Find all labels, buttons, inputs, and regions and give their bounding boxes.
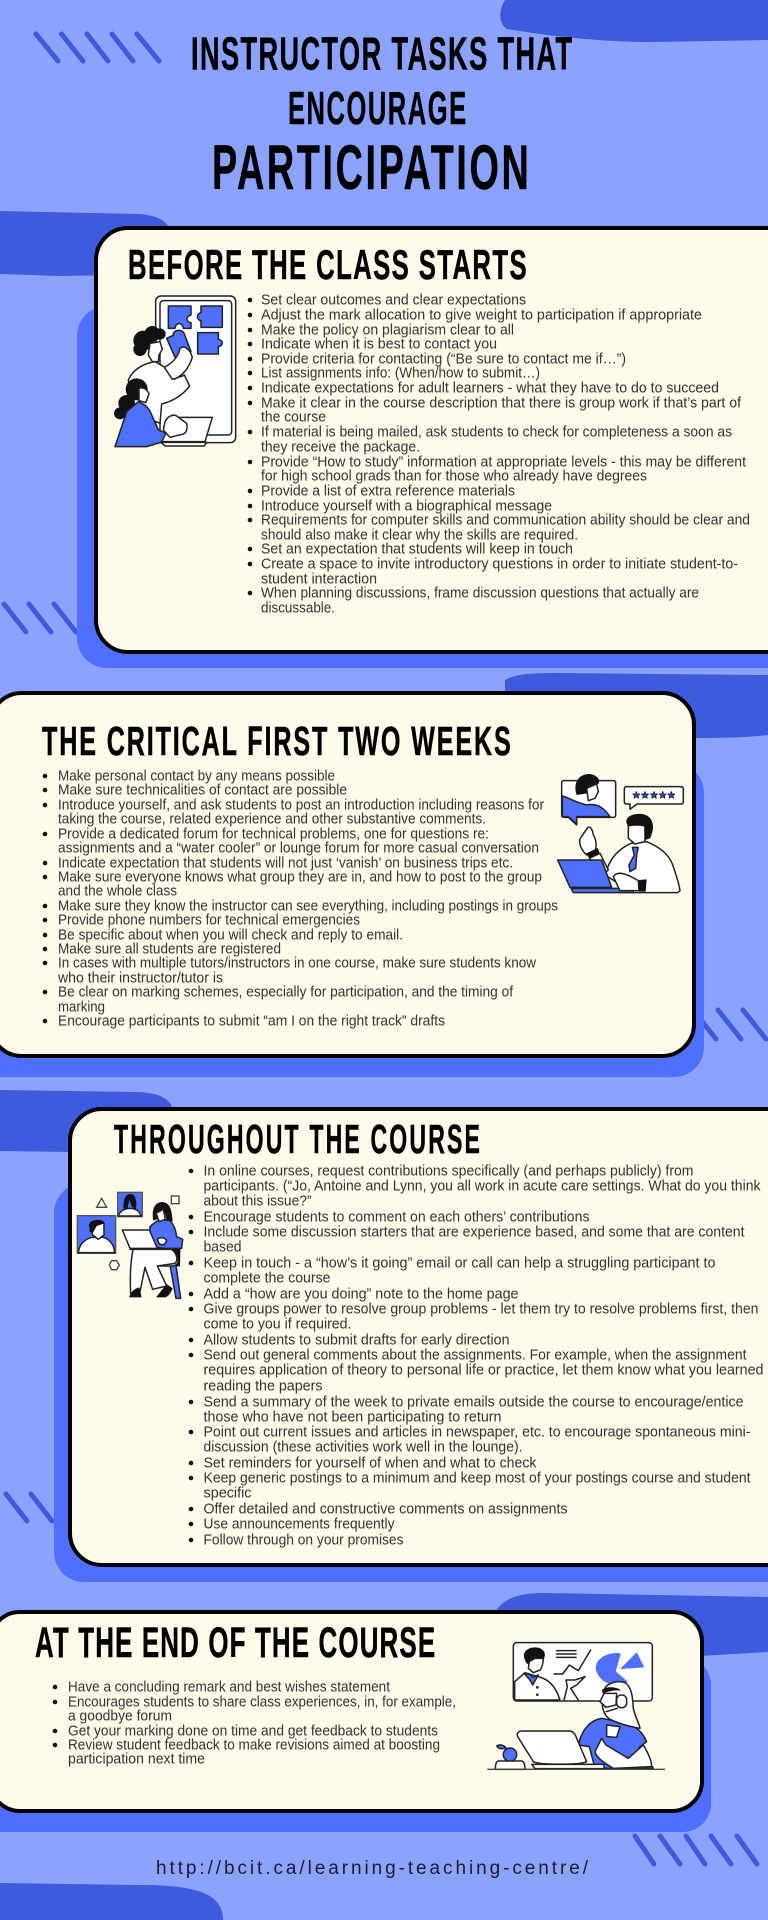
bullet list: before the class starts: Set an expectation that students will keep in touch: [261, 542, 573, 558]
blob: right of second panel: [505, 673, 768, 738]
bullet list: first two weeks: Be clear on marking schemes, especially for participation, and the timing of: [58, 984, 514, 1000]
bullet list: before the class starts: they receive the package.: [261, 440, 420, 456]
bullet list: throughout the course: complete the course: [204, 1270, 330, 1286]
slashes: left of third panel: [6, 1494, 52, 1521]
bullet list: first two weeks: Be specific about when you will check and reply to email.: [58, 928, 403, 944]
blob: bottom left: [0, 1883, 223, 1920]
title: INSTRUCTOR TASKS THAT: [191, 29, 572, 80]
slashes: left of first panel: [4, 604, 76, 632]
heading: before the class starts: BEFORE THE CLASS STARTS: [128, 243, 527, 289]
panel: at the end of the course: [0, 1612, 711, 1832]
bullet list: throughout the course: about this issue?”: [204, 1192, 312, 1210]
bullet list: throughout the course: those who have not been participating to return: [204, 1408, 502, 1426]
blob: right of fourth panel: [495, 1593, 768, 1656]
bullet list: before the class starts: Introduce yourself with a biographical message: [261, 498, 552, 514]
panel: before the class starts: [77, 228, 768, 668]
slashes: top left: [36, 34, 159, 61]
bullet list: throughout the course: Keep in touch - a “how’s it going” email or call can help a struggling participant to: [204, 1254, 716, 1272]
bullet list: throughout the course: Use announcements frequently: [204, 1516, 395, 1532]
source url: http://bcit.ca/learning-teaching-centre/: [156, 1858, 589, 1879]
bullet list: end of the course: Have a concluding remark and best wishes statement: [68, 1680, 390, 1696]
bullet list: before the class starts: discussable.: [261, 600, 335, 616]
panel: throughout the course: [54, 1109, 768, 1582]
title: PARTICIPATION: [212, 133, 529, 204]
bullet list: before the class starts: Create a space to invite introductory questions in order to initiate student-to-: [261, 556, 738, 572]
bullet list: first two weeks: Make sure technicalities of contact are possible: [58, 782, 347, 798]
blob: top right: [500, 0, 768, 42]
bullet list: first two weeks: Introduce yourself, and ask students to post an introduction including reasons for: [58, 798, 544, 814]
bullet list: before the class starts: Provide a list of extra reference materials: [261, 484, 515, 500]
bullet list: before the class starts: the course: [261, 410, 326, 426]
bullet list: throughout the course: Allow students to submit drafts for early direction: [204, 1332, 510, 1348]
bullet list: first two weeks: taking the course, related experience and other substantive comments.: [58, 812, 486, 828]
bullet list: throughout the course: specific: [204, 1484, 252, 1502]
slashes: right of second panel: [693, 1010, 766, 1039]
bullet list: first two weeks: assignments and a “water cooler” or lounge forum for more casual conversation: [58, 840, 539, 856]
bullet list: throughout the course: come to you if required.: [204, 1316, 352, 1332]
bullet list: throughout the course: Point out current issues and articles in newspaper, etc. to encourage spontaneous mini-: [204, 1424, 751, 1440]
bullet list: first two weeks: Encourage participants to submit “am I on the right track” drafts: [58, 1014, 445, 1030]
panel: the critical first two weeks: [0, 693, 704, 1077]
bullet list: first two weeks: Make sure all students are registered: [58, 942, 281, 958]
bullet list: throughout the course: In online courses, request contributions specifically (and perhaps publicly) from: [204, 1162, 694, 1180]
bullet list: first two weeks: Make personal contact by any means possible: [58, 768, 335, 784]
bullet list: first two weeks: and the whole class: [58, 884, 177, 900]
bullet list: end of the course: Review student feedback to make revisions aimed at boosting: [68, 1738, 440, 1754]
heading: the critical first two weeks: THE CRITICAL FIRST TWO WEEKS: [42, 720, 511, 765]
bullet list: throughout the course: Offer detailed and constructive comments on assignments: [204, 1500, 568, 1518]
bullet list: before the class starts: Requirements for computer skills and communication ability should be clear and: [261, 512, 750, 528]
bullet list: first two weeks: Indicate expectation that students will not just ‘vanish’ on business trips etc.: [58, 856, 513, 872]
bullet list: before the class starts: Provide “How to study” information at appropriate levels - this may be different: [261, 454, 746, 470]
icon: two women solving a puzzle: [114, 296, 236, 447]
bullet list: before the class starts: If material is being mailed, ask students to check for completeness a soon as: [261, 424, 732, 440]
bullet list: before the class starts: Indicate expectations for adult learners - what they have to do to succeed: [261, 380, 719, 396]
bullet list: end of the course: [53, 1680, 456, 1768]
bullet list: before the class starts: Make the policy on plagiarism clear to all: [261, 322, 514, 338]
title: ENCOURAGE: [288, 82, 466, 134]
icon: instructor on video call with rating bubble: [558, 774, 683, 893]
bullet list: throughout the course: Encourage students to comment on each others’ contributions: [204, 1208, 590, 1226]
icon: student with headset watching a video lesson: [487, 1643, 665, 1769]
bullet list: end of the course: participation next time: [68, 1752, 205, 1768]
bullet list: throughout the course: reading the papers: [204, 1378, 322, 1394]
bullet list: throughout the course: Include some discussion starters that are experience based, and some that are content: [204, 1224, 745, 1240]
bullet list: before the class starts: Make it clear in the course description that there is group work if that’s part of: [261, 396, 742, 412]
blob: left of third panel: [0, 1090, 173, 1152]
bullet list: first two weeks: marking: [58, 1000, 105, 1016]
bullet list: first two weeks: [43, 768, 558, 1030]
heading: throughout the course: THROUGHOUT THE COURSE: [114, 1116, 480, 1162]
title: [191, 29, 572, 204]
bullet list: throughout the course: Add a “how are you doing” note to the home page: [204, 1286, 518, 1302]
bullet list: first two weeks: In cases with multiple tutors/instructors in one course, make sure students know: [58, 956, 536, 972]
bullet list: first two weeks: Make sure they know the instructor can see everything, including postings in groups: [58, 898, 558, 914]
icon: student on video call with laptop: [77, 1192, 183, 1298]
bullet list: throughout the course: based: [204, 1238, 242, 1256]
slashes: bottom right: [635, 1836, 757, 1864]
bullet list: before the class starts: should also make it clear why the skills are required.: [261, 528, 578, 544]
heading: at the end of the course: AT THE END OF THE COURSE: [35, 1620, 435, 1667]
bullet list: before the class starts: Set clear outcomes and clear expectations: [261, 292, 526, 308]
bullet list: throughout the course: [189, 1162, 763, 1548]
bullet list: throughout the course: Set reminders for yourself of when and what to check: [204, 1454, 537, 1472]
bullet list: before the class starts: student interaction: [261, 572, 377, 588]
bullet list: before the class starts: Provide criteria for contacting (“Be sure to contact me if…”): [261, 352, 626, 368]
bullet list: end of the course: a goodbye forum: [68, 1708, 172, 1724]
bullet list: before the class starts: List assignments info: (When/how to submit…): [261, 366, 540, 382]
bullet list: first two weeks: who their instructor/tutor is: [57, 970, 223, 986]
bullet list: throughout the course: Send a summary of the week to private emails outside the course to encourage/entice: [204, 1394, 744, 1410]
bullet list: before the class starts: [248, 292, 750, 616]
bullet list: first two weeks: Provide phone numbers for technical emergencies: [58, 912, 360, 928]
bullet list: before the class starts: Adjust the mark allocation to give weight to participation if appropriate: [261, 308, 702, 324]
bullet list: before the class starts: When planning discussions, frame discussion questions that actually are: [261, 586, 699, 602]
bullet list: throughout the course: Follow through on your promises: [204, 1532, 404, 1548]
bullet list: end of the course: Encourages students to share class experiences, in, for example,: [68, 1694, 456, 1710]
bullet list: first two weeks: Make sure everyone knows what group they are in, and how to post to the group: [58, 870, 542, 886]
bullet list: before the class starts: for high school grads than for those who already have degrees: [261, 468, 647, 484]
bullet list: before the class starts: Indicate when it is best to contact you: [261, 336, 497, 352]
bullet list: throughout the course: discussion (these activities work well in the lounge).: [204, 1438, 522, 1456]
bullet list: end of the course: Get your marking done on time and get feedback to students: [68, 1724, 438, 1740]
bullet list: first two weeks: Provide a dedicated forum for technical problems, one for questions re:: [58, 826, 489, 842]
blob: left of first panel: [0, 211, 170, 276]
